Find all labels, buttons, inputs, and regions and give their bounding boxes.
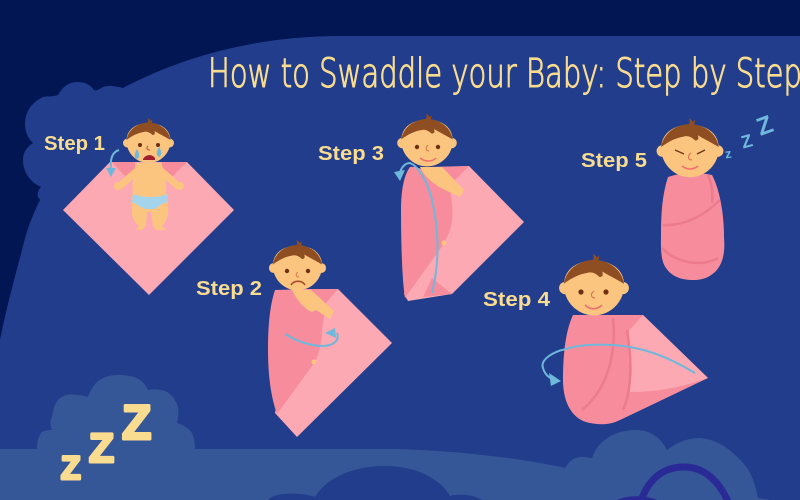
- step 5 label: Step 5: [581, 150, 647, 172]
- blue zzz: [724, 110, 777, 161]
- big sleeping zzz: Z: [89, 425, 114, 471]
- dark arc: [640, 467, 729, 500]
- step 4: wrapping: [543, 254, 708, 424]
- step 2: first fold: [268, 240, 392, 437]
- blue zzz: Z: [753, 110, 777, 142]
- step 2 label: Step 2: [196, 278, 262, 300]
- dark cloud silhouette: [268, 466, 482, 500]
- step 1 label: Step 1: [44, 133, 105, 155]
- step 3: second fold: [394, 114, 524, 301]
- step 1: baby on blanket: [63, 118, 234, 295]
- step 3 label: Step 3: [318, 143, 384, 165]
- bottom clouds and ground: [0, 375, 770, 500]
- blue zzz: z: [724, 146, 733, 161]
- step 4 label: Step 4: [483, 289, 551, 311]
- blue zzz: Z: [739, 130, 755, 152]
- step 5: swaddled sleeping baby: [657, 110, 777, 280]
- big sleeping zzz: [61, 397, 151, 486]
- big sleeping zzz: Z: [122, 397, 151, 450]
- big sleeping zzz: Z: [61, 450, 81, 486]
